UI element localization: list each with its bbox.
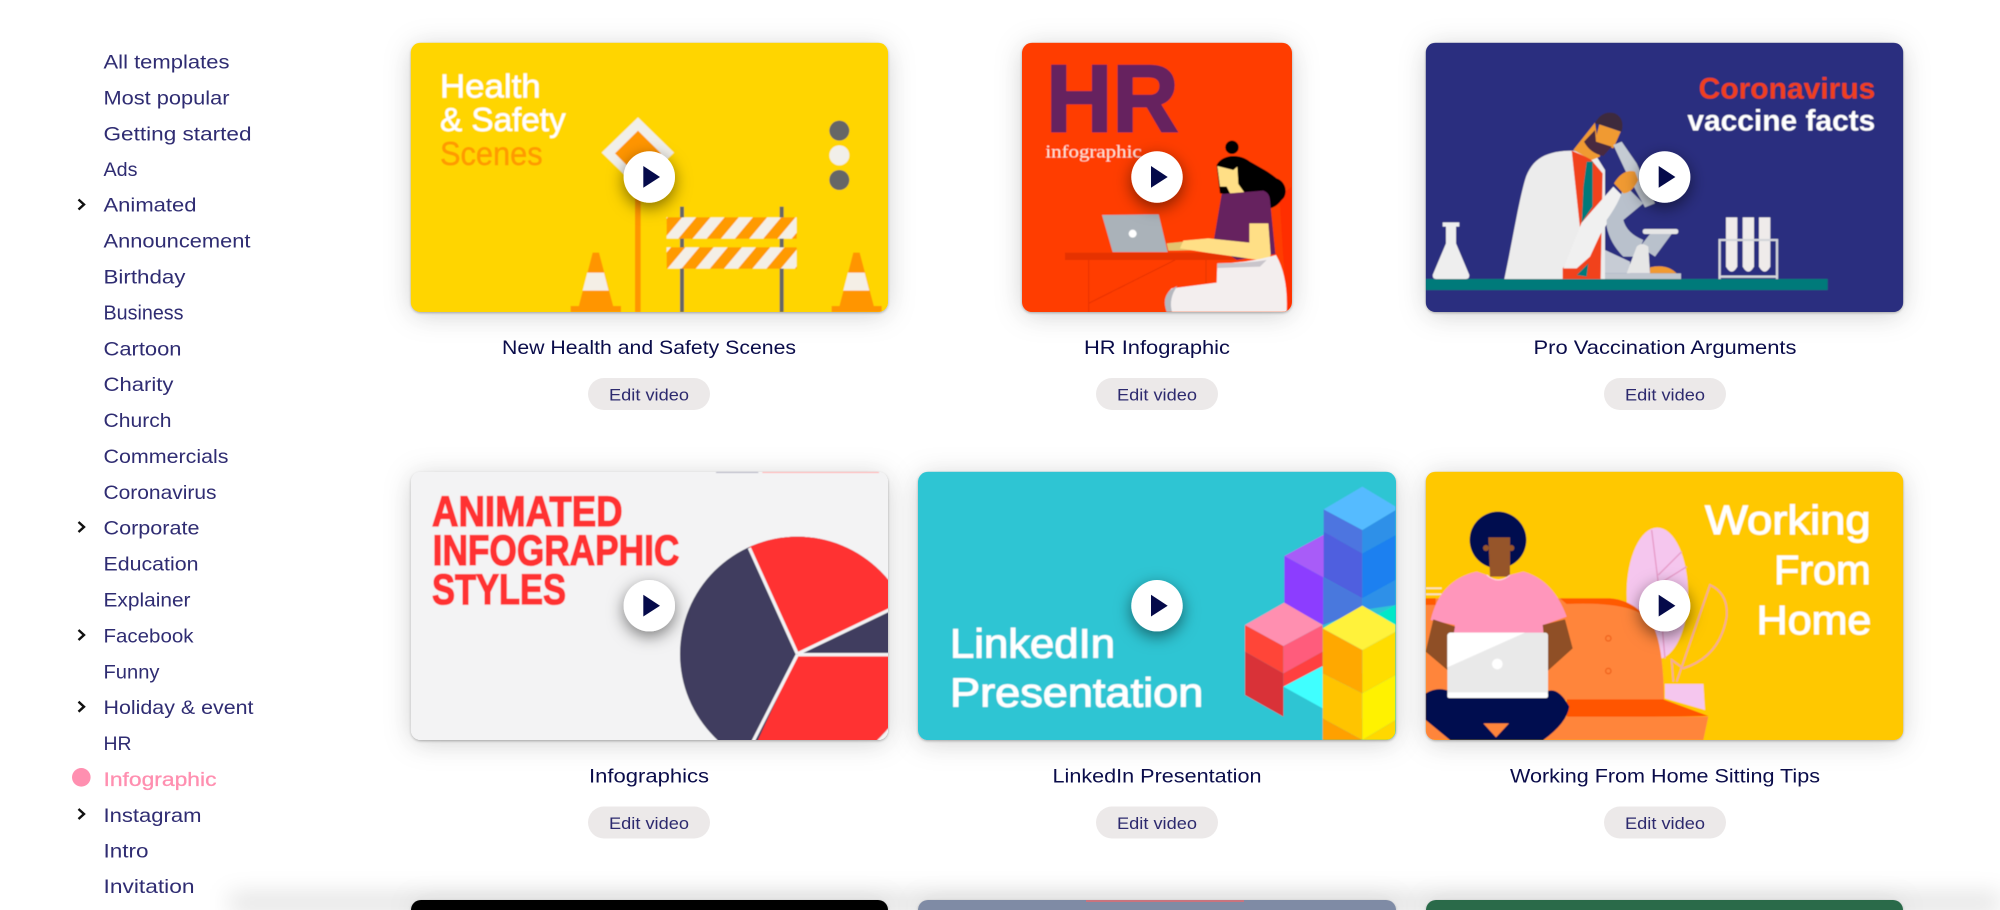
edit video button <box>1604 806 1726 838</box>
nav item: Instagram <box>104 805 202 827</box>
edit video button <box>588 806 710 838</box>
nav item: Getting started <box>104 123 252 145</box>
nav item: All templates <box>104 51 230 73</box>
card: New Health and Safety Scenes <box>411 43 888 410</box>
partial card: slate <box>918 900 1396 910</box>
nav item: Coronavirus <box>104 482 217 504</box>
nav item: Charity <box>104 374 174 396</box>
card title: HR Infographic <box>1084 337 1230 359</box>
nav item: Ads <box>104 159 138 181</box>
partial card: black <box>411 900 888 910</box>
thumbnail artwork: person on sofa: Home <box>1757 597 1871 643</box>
thumbnail artwork: person on sofa: From <box>1774 547 1871 593</box>
card: Infographics <box>411 472 967 838</box>
thumbnail artwork: road works <box>411 43 888 312</box>
active marker dot <box>72 768 91 787</box>
thumbnail background <box>411 43 888 312</box>
nav item: Animated <box>104 195 196 217</box>
edit video button: Edit video <box>1117 386 1197 405</box>
chevron icon <box>78 522 84 532</box>
thumbnail artwork: scientist at microscope: vaccine facts <box>1687 105 1875 138</box>
bottom fade <box>230 896 2000 910</box>
chevron icon <box>78 200 84 210</box>
thumbnail artwork: pie chart: STYLES <box>432 566 566 614</box>
nav item: Birthday <box>104 267 186 289</box>
thumbnail background <box>918 472 1396 740</box>
thumbnail artwork: woman at laptop: infographic <box>1045 142 1142 162</box>
thumbnail artwork: road works: & Safety <box>440 102 566 139</box>
thumbnail artwork: scientist at microscope <box>1426 43 1903 312</box>
edit video button <box>588 378 710 410</box>
edit video button <box>1096 378 1218 410</box>
nav item: Invitation <box>104 876 194 898</box>
nav item: Explainer <box>104 590 191 612</box>
edit video button: Edit video <box>1117 814 1197 833</box>
card: Working From Home Sitting Tips <box>1426 472 1903 838</box>
card: Pro Vaccination Arguments <box>1426 43 1903 410</box>
nav item: Church <box>104 410 172 432</box>
nav item: Most popular <box>104 87 230 109</box>
chevron icon <box>78 809 84 819</box>
nav item: Cartoon <box>104 338 182 360</box>
chevron icon <box>78 702 84 712</box>
thumbnail artwork: pie chart: ANIMATED <box>432 488 623 536</box>
nav item: Facebook <box>104 626 194 648</box>
play button <box>624 151 675 203</box>
thumbnail artwork: pie chart: INFOGRAPHIC <box>433 527 679 575</box>
thumbnail background <box>1426 43 1903 312</box>
sidebar category list <box>72 51 254 898</box>
thumbnail background <box>1022 43 1292 312</box>
thumbnail artwork: person on sofa: Working <box>1705 497 1871 543</box>
play button <box>624 580 675 631</box>
thumbnail artwork: road works: Scenes <box>440 136 543 173</box>
nav item: Commercials <box>104 446 229 468</box>
edit video button: Edit video <box>609 386 689 405</box>
card title: Working From Home Sitting Tips <box>1510 766 1820 788</box>
nav item: Holiday & event <box>104 697 254 719</box>
nav item: HR <box>104 733 132 755</box>
nav item: Intro <box>104 840 149 862</box>
thumbnail artwork: woman at laptop: HR <box>1046 47 1179 153</box>
nav item: Corporate <box>104 518 200 540</box>
nav item: Education <box>104 554 198 576</box>
active nav item: Infographic <box>104 769 217 791</box>
play button <box>1639 580 1690 631</box>
card title: Infographics <box>589 766 709 788</box>
thumbnail background <box>411 472 888 740</box>
chevron icon <box>78 630 84 640</box>
thumbnail artwork: road works: Health <box>440 69 541 106</box>
card: LinkedIn Presentation <box>918 472 1396 838</box>
thumbnail artwork: pie chart <box>410 472 888 740</box>
thumbnail artwork: woman at laptop <box>1022 43 1292 312</box>
edit video button <box>1096 806 1218 838</box>
card title: Pro Vaccination Arguments <box>1534 337 1797 359</box>
thumbnail background <box>1426 472 1903 740</box>
edit video button: Edit video <box>1625 386 1705 405</box>
play button <box>1131 580 1183 631</box>
card title: LinkedIn Presentation <box>1052 766 1262 788</box>
partial third row of cards <box>230 896 2000 910</box>
play button <box>1639 151 1690 203</box>
thumbnail artwork: scientist at microscope: Coronavirus <box>1699 72 1875 105</box>
thumbnail artwork: person on sofa <box>1426 472 1903 740</box>
play button <box>1131 151 1183 203</box>
partial card: green <box>1426 900 1903 910</box>
edit video button: Edit video <box>1625 814 1705 833</box>
nav item: Business <box>104 302 184 325</box>
nav item: Funny <box>104 661 160 683</box>
edit video button <box>1604 378 1726 410</box>
thumbnail artwork: isometric cubes: LinkedIn <box>950 621 1115 667</box>
nav item: Announcement <box>104 231 251 253</box>
card title: New Health and Safety Scenes <box>502 337 796 359</box>
card: HR Infographic <box>1022 43 1292 410</box>
edit video button: Edit video <box>609 814 689 833</box>
thumbnail artwork: isometric cubes <box>918 472 1396 740</box>
thumbnail artwork: isometric cubes: Presentation <box>950 670 1203 716</box>
